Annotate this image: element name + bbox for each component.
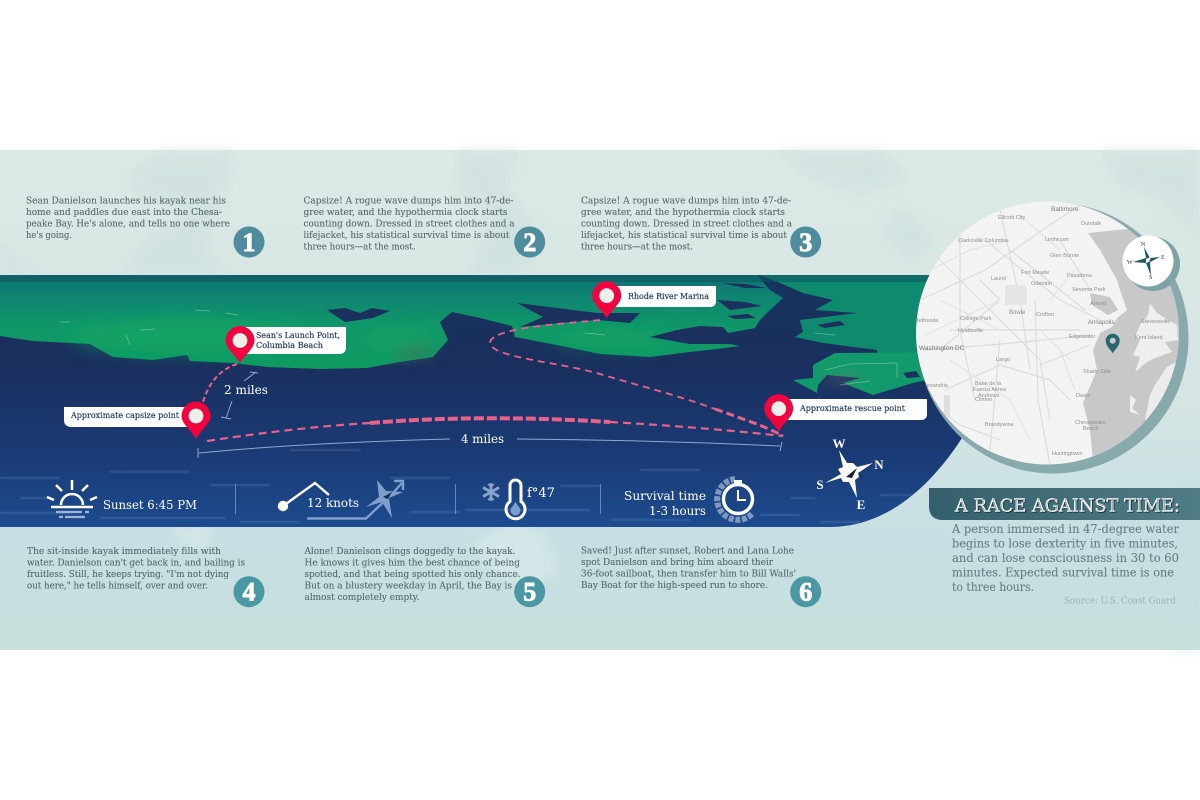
badge 5: 5	[523, 578, 536, 606]
route: capsize to rescue, dashed	[207, 418, 783, 441]
step 3: Capsize! A rogue wave dumps him into 47-de-	[581, 196, 791, 206]
map compass: S	[1149, 275, 1152, 281]
badge 6	[790, 576, 821, 607]
land: dark top edge	[0, 275, 975, 282]
locator map: Edgewater	[1069, 334, 1095, 340]
stat: wind speed: 12 knots	[307, 495, 359, 510]
map marker	[1106, 334, 1120, 353]
locator map: Baltimore	[1051, 206, 1079, 213]
step 4: The sit-inside kayak immediately fills with	[27, 547, 221, 557]
text block: survival facts	[951, 521, 1179, 594]
badge 4	[234, 576, 264, 607]
pin: marina	[592, 281, 621, 318]
locator map: Beach	[1083, 426, 1099, 432]
map compass: E	[1161, 255, 1165, 261]
icon: compass on water: S	[816, 477, 824, 492]
step 4: out here," he tells himself, over and over.	[27, 582, 208, 592]
step 1: peake Bay. He's alone, and tells no one where	[26, 220, 230, 230]
icon: thermometer	[506, 480, 525, 519]
locator map: Arnold	[1090, 301, 1106, 307]
icon: stopwatch	[717, 479, 752, 520]
map ring	[918, 202, 1188, 474]
heading banner: A RACE AGAINST TIME:	[954, 496, 1180, 516]
locator map: Shady Side	[1083, 369, 1111, 375]
step 4: fruitless. Still, he keeps trying. "I'm not dying	[27, 570, 229, 580]
stat: sunset: Sunset 6:45 PM	[103, 497, 197, 512]
label: launch point: Sean's Launch Point,	[256, 331, 340, 341]
locator map: Hyattsville	[958, 328, 983, 334]
step 2: three hours—at the most.	[304, 242, 416, 252]
step 6: 36-foot sailboat, then transfer him to Bill Walls'	[581, 570, 796, 580]
icon: compass on water	[816, 436, 884, 512]
step 3: counting down. Dressed in street clothes and a	[581, 220, 793, 230]
locator map: Base de la	[975, 381, 1002, 387]
locator map: Huntingtown	[1052, 451, 1083, 457]
label: rescue point: Approximate rescue point	[799, 404, 906, 414]
map compass: N	[1141, 242, 1146, 248]
icon: wind gauge	[278, 480, 403, 518]
step 1: home and paddles due east into the Chesa-	[26, 208, 222, 218]
step 1: he's going.	[26, 231, 72, 241]
label: rescue point	[780, 399, 927, 420]
locator map: Clinton	[975, 397, 992, 403]
locator map: Clarksville Columbia	[958, 238, 1009, 244]
stat: water temperature: f°47	[527, 486, 555, 501]
badge 5	[514, 576, 545, 607]
badge 3	[790, 226, 821, 258]
step 4	[27, 547, 264, 607]
locator map: Fort Meade	[1021, 270, 1049, 276]
map band: bay scene	[0, 275, 975, 527]
locator map: Laurel	[991, 276, 1006, 282]
badge 6: 6	[799, 578, 812, 606]
step 5: Alone! Danielson clings doggedly to the kayak.	[304, 547, 516, 557]
locator map	[915, 202, 1200, 480]
step 3	[581, 196, 821, 258]
step 2: Capsize! A rogue wave dumps him into 47-de-	[304, 196, 514, 206]
locator map: Kent Island	[1135, 335, 1163, 341]
badge 4: 4	[242, 578, 256, 606]
icon: compass on water: N	[874, 457, 884, 472]
locator map: Stevensville	[1141, 319, 1170, 325]
icon: compass on water: E	[857, 497, 865, 512]
locator map: Bowie	[1009, 310, 1026, 316]
stat: survival time: Survival time	[624, 488, 706, 503]
locator map: Fuerza Aérea	[973, 387, 1007, 393]
text block: survival facts: minutes. Expected survival time is one	[952, 564, 1174, 580]
locator map: Dundalk	[1081, 221, 1101, 227]
step 2: gree water, and the hypothermia clock starts	[304, 208, 508, 218]
pin: capsize point	[182, 402, 210, 439]
water	[0, 275, 975, 527]
locator map: Largo	[996, 357, 1010, 363]
badge 2: 2	[523, 228, 536, 257]
step 4: water. Danielson can't get back in, and bailing is	[27, 558, 245, 568]
locator map: Annapolis	[1088, 320, 1114, 326]
step 6: spot Danielson and bring him aboard their	[581, 558, 774, 568]
badge 1	[234, 226, 264, 258]
stat: survival time	[624, 479, 752, 520]
step 3: three hours—at the most.	[581, 242, 693, 252]
text block: survival facts: and can lose consciousness in 30 to 60	[952, 550, 1179, 565]
step 6: Saved! Just after sunset, Robert and Lana Lohe	[581, 546, 794, 556]
source note: Source: U.S. Coast Guard	[1064, 596, 1176, 606]
map compass	[1122, 236, 1180, 291]
badge 2	[514, 226, 545, 258]
pin: rescue point	[764, 394, 793, 432]
heading banner	[929, 488, 1200, 520]
text block: survival facts: to three hours.	[952, 579, 1034, 594]
infographic: a race against time	[0, 147, 1200, 653]
map disc	[916, 202, 1179, 464]
locator map: Pasadena	[1067, 273, 1093, 279]
icon: snowflake	[483, 483, 499, 501]
step 2: lifejacket, his statistical survival time is about	[304, 231, 510, 241]
eastern shore	[1133, 303, 1178, 372]
water streaks	[0, 450, 915, 522]
bay water	[1083, 229, 1179, 456]
label: marina	[606, 286, 716, 307]
land shading	[70, 317, 670, 354]
step 1: Sean Danielson launches his kayak near his	[26, 196, 226, 206]
step 5: He knows it gives him the best chance of being	[304, 558, 520, 568]
route: launch to capsize, dashed	[203, 364, 237, 402]
badge 3: 3	[799, 228, 812, 257]
locator map: Glen Burnie	[1050, 253, 1079, 259]
stat: survival time: 1-3 hours	[649, 503, 706, 518]
stat: sunset	[47, 480, 197, 517]
label: capsize point: Approximate capsize point	[70, 411, 180, 421]
locator map: Deale	[1076, 393, 1090, 399]
background panel	[0, 150, 1200, 650]
distance: 2 miles	[221, 372, 268, 419]
stat: wind speed	[278, 480, 403, 518]
step 3: gree water, and the hypothermia clock starts	[581, 208, 785, 218]
distance: 2 miles: 2 miles	[224, 383, 268, 397]
locator map: Severna Park	[1072, 287, 1106, 293]
locator map: Bethesda	[915, 318, 939, 324]
icon: sunset	[47, 480, 97, 517]
stat: water temperature	[483, 480, 555, 519]
step 2: counting down. Dressed in street clothes and a	[304, 220, 515, 230]
locator map: College Park	[960, 316, 992, 322]
text block: survival facts: A person immersed in 47-degree water	[951, 521, 1179, 536]
step 5	[304, 547, 545, 607]
shoals	[392, 342, 862, 384]
label: marina: Rhode River Marina	[628, 292, 709, 302]
locator map: Ellicott City	[998, 215, 1025, 221]
label: capsize point	[64, 407, 196, 427]
step 5: But on a blustery weekday in April, the Bay is	[304, 582, 512, 592]
distance: 4 miles	[198, 432, 782, 458]
land: eastern shore lower	[793, 352, 975, 395]
land: western shore	[0, 275, 783, 369]
locator map: Crofton	[1036, 312, 1054, 318]
map compass: W	[1127, 260, 1133, 266]
distance: 4 miles: 4 miles	[461, 432, 504, 446]
land: eastern shore upper	[760, 275, 975, 358]
locator map: Andrews	[978, 393, 1000, 399]
step 5: spotted, and that being spotted his only chance.	[304, 570, 521, 580]
step 5: almost completely empty.	[304, 593, 420, 603]
locator map: Brandywine	[985, 422, 1014, 428]
divider	[236, 484, 600, 514]
step 3: lifejacket, his statistical survival time is about	[581, 231, 787, 241]
step 2	[304, 196, 545, 258]
icon: compass on water: W	[832, 436, 846, 451]
pin: launch point	[226, 326, 254, 363]
step 1	[26, 196, 264, 258]
badge 1: 1	[242, 228, 256, 257]
locator map: Chesapeake	[1075, 420, 1106, 426]
text block: survival facts: begins to lose dexterity in five minutes,	[952, 536, 1178, 550]
locator map: Washington DC	[919, 345, 965, 352]
label: launch point: Columbia Beach	[256, 341, 323, 351]
label: launch point	[240, 327, 346, 354]
locator map: Alexandria	[922, 383, 949, 389]
step 6	[581, 546, 821, 607]
locator map: Linthicum	[1045, 237, 1069, 243]
route: rescue to marina, dashed	[490, 320, 783, 436]
locator map: Odenton	[1031, 281, 1052, 287]
step 6: Bay Boat for the high-speed run to shore.	[581, 581, 768, 591]
